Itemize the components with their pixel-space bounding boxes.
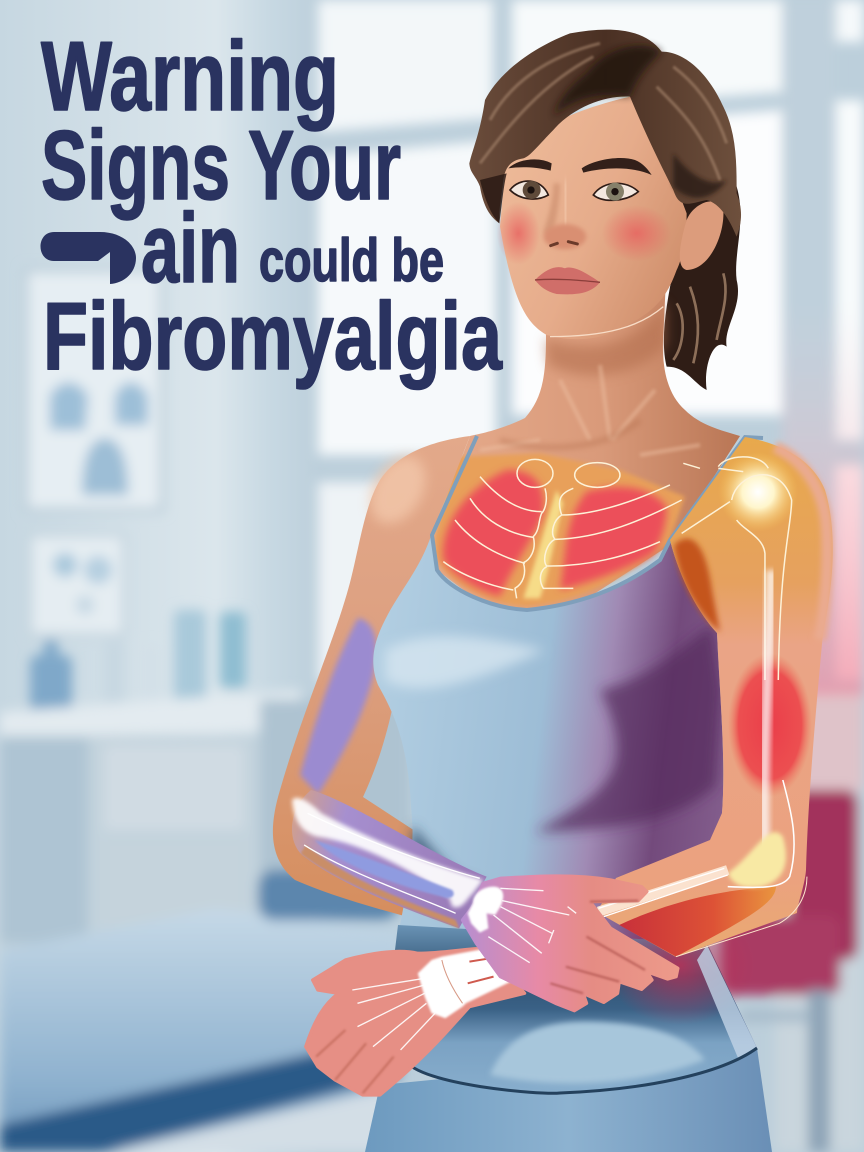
icon: capsule replacing the letter P <box>40 232 136 284</box>
forearm, viewer left <box>292 790 487 928</box>
hem line <box>405 1048 757 1093</box>
wall poster <box>26 270 162 510</box>
title <box>40 21 502 390</box>
title: Signs Your <box>41 110 401 220</box>
orange underside of forearm <box>301 845 459 928</box>
bone <box>292 798 483 907</box>
purple pain area upper arm <box>300 618 376 795</box>
window panes <box>318 0 864 700</box>
hair shadows <box>553 45 662 117</box>
nerve lines <box>488 888 576 963</box>
pink outer rim of shoulder <box>775 447 827 640</box>
title: Fibromyalgia <box>43 283 502 390</box>
wrist bones <box>418 948 514 1018</box>
woman <box>273 30 833 1152</box>
red chair <box>720 690 864 1152</box>
shoulder and arm, viewer left <box>273 436 490 930</box>
top shading <box>385 625 722 905</box>
knuckle creases <box>316 1030 394 1093</box>
hair highlights <box>480 43 727 180</box>
ear <box>680 201 723 270</box>
panel: chest pain overlay <box>435 453 685 607</box>
small wall chart <box>30 535 124 635</box>
hair front <box>469 30 741 237</box>
title: could be <box>259 227 444 294</box>
nose <box>543 180 586 249</box>
bicep hot spot <box>728 653 812 797</box>
light dome on lower top <box>490 1022 705 1083</box>
neck and chest skin <box>432 280 740 612</box>
shoulder joint glow <box>718 452 798 532</box>
straps and neckline <box>432 436 763 610</box>
lower part of top <box>395 925 757 1093</box>
finger creases <box>550 901 645 993</box>
carpal bones <box>468 887 503 933</box>
dark orange shading under shoulder <box>674 539 720 632</box>
cheeks <box>497 202 540 265</box>
shelf bottles <box>30 610 246 719</box>
title: ain <box>141 193 240 303</box>
hair back <box>660 103 740 390</box>
jaw line <box>550 307 663 337</box>
forearm, viewer right <box>599 780 807 957</box>
shoulder and arm lines <box>682 457 792 680</box>
cabinet <box>0 690 410 950</box>
shoulder highlight <box>359 447 437 533</box>
eyebrows <box>508 159 552 171</box>
arm bone, viewer right <box>764 570 771 850</box>
lavender strip <box>314 840 454 898</box>
mouth <box>535 267 600 294</box>
title: Warning <box>41 21 339 131</box>
exam bed <box>0 870 400 1152</box>
pants <box>365 1048 772 1152</box>
rib lines <box>443 459 682 598</box>
pink reflection on top <box>605 905 755 1025</box>
lower hand <box>306 948 525 1095</box>
tank top <box>373 436 763 1093</box>
face <box>497 97 723 339</box>
light right edge of top <box>697 945 757 1058</box>
eyes <box>510 181 638 201</box>
upper hand <box>463 876 678 1011</box>
shoulder and arm, viewer right <box>597 437 833 957</box>
nerve lines <box>352 978 435 1050</box>
